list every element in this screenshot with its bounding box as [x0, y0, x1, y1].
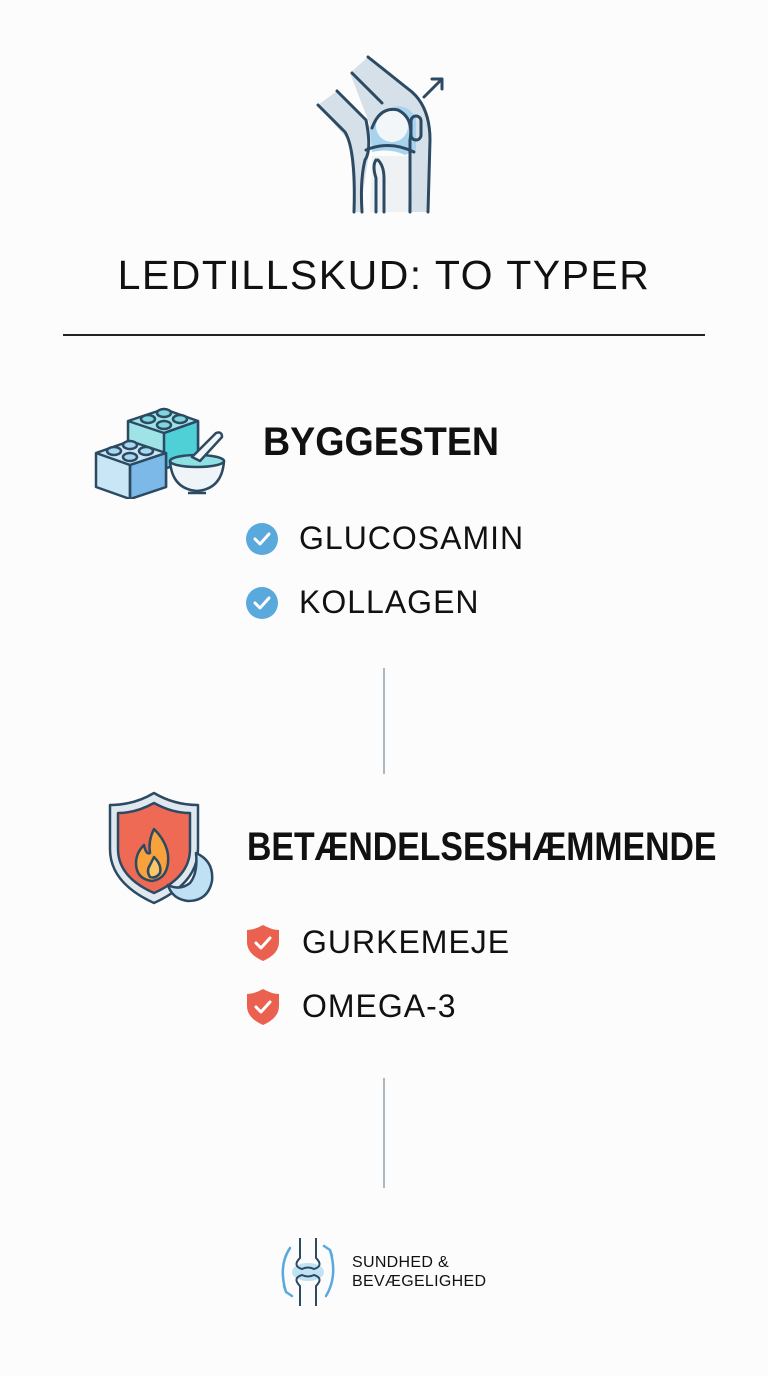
icon: check circle [246, 587, 278, 619]
footer text: BEVÆGELIGHED [352, 1273, 486, 1290]
title: LEDTILLSKUD: TO TYPER [118, 252, 650, 298]
heading: byggesten: BYGGESTEN [263, 420, 499, 464]
footer text: SUNDHED & [352, 1254, 449, 1271]
connector line 2 [383, 1078, 385, 1188]
icon: building blocks and mortar [94, 408, 226, 499]
icon: shield with flame [108, 792, 214, 904]
icon: shield check [247, 925, 279, 961]
divider [63, 334, 705, 336]
connector line 1 [383, 668, 385, 774]
footer logo [282, 1238, 486, 1306]
panel: betændelseshæmmende [108, 792, 716, 1025]
item: gurkemeje: GURKEMEJE [302, 924, 510, 960]
icon: check circle [246, 523, 278, 555]
item: omega-3: OMEGA-3 [302, 988, 457, 1024]
footer text [352, 1254, 486, 1290]
icon: knee joint [316, 55, 444, 214]
panel: byggesten [94, 408, 524, 620]
heading: betændelseshæmmende: BETÆNDELSESHÆMMENDE [247, 825, 716, 869]
icon: joint with arrows [282, 1238, 334, 1306]
item: kollagen: KOLLAGEN [299, 584, 480, 620]
icon: shield check [247, 989, 279, 1025]
item: glucosamin: GLUCOSAMIN [299, 520, 524, 556]
